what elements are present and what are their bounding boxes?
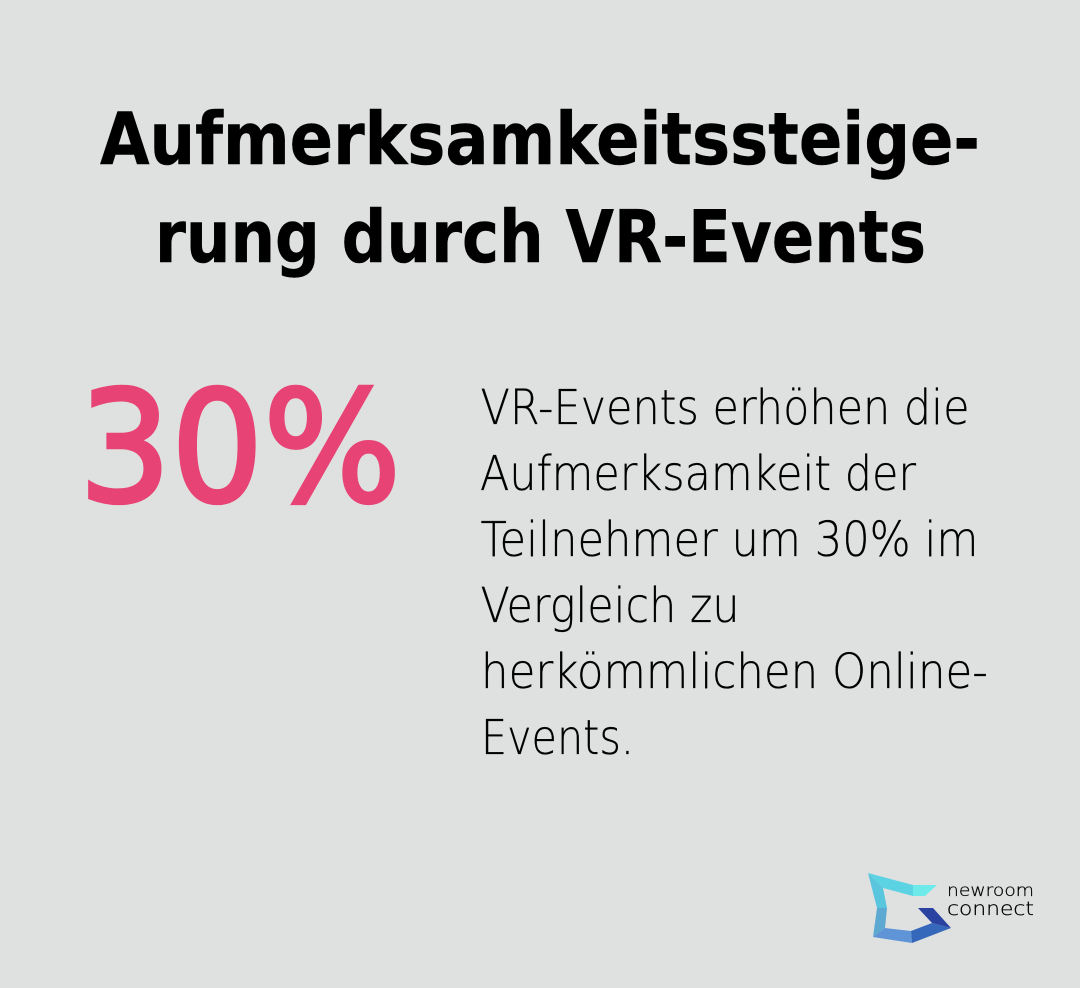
big statistic: 30%: 30% [79,359,401,538]
title [100,97,980,279]
title: rung durch VR-Events [155,195,926,279]
description text: Events. [481,710,634,766]
description text: Aufmerksamkeit der [480,446,916,502]
logo wordmark: newroom [947,881,1034,901]
description text [480,380,988,766]
logo wordmark [947,881,1034,920]
logo: newroom connect [868,873,1034,943]
description text: Vergleich zu [480,578,740,634]
description text: Teilnehmer um 30% im [480,512,978,568]
description text: VR-Events erhöhen die [480,380,970,436]
description text: herkömmlichen Online- [481,644,988,700]
title: Aufmerksamkeitssteige- [100,97,980,181]
logo wordmark: connect [947,898,1034,920]
logo mark [868,873,951,943]
